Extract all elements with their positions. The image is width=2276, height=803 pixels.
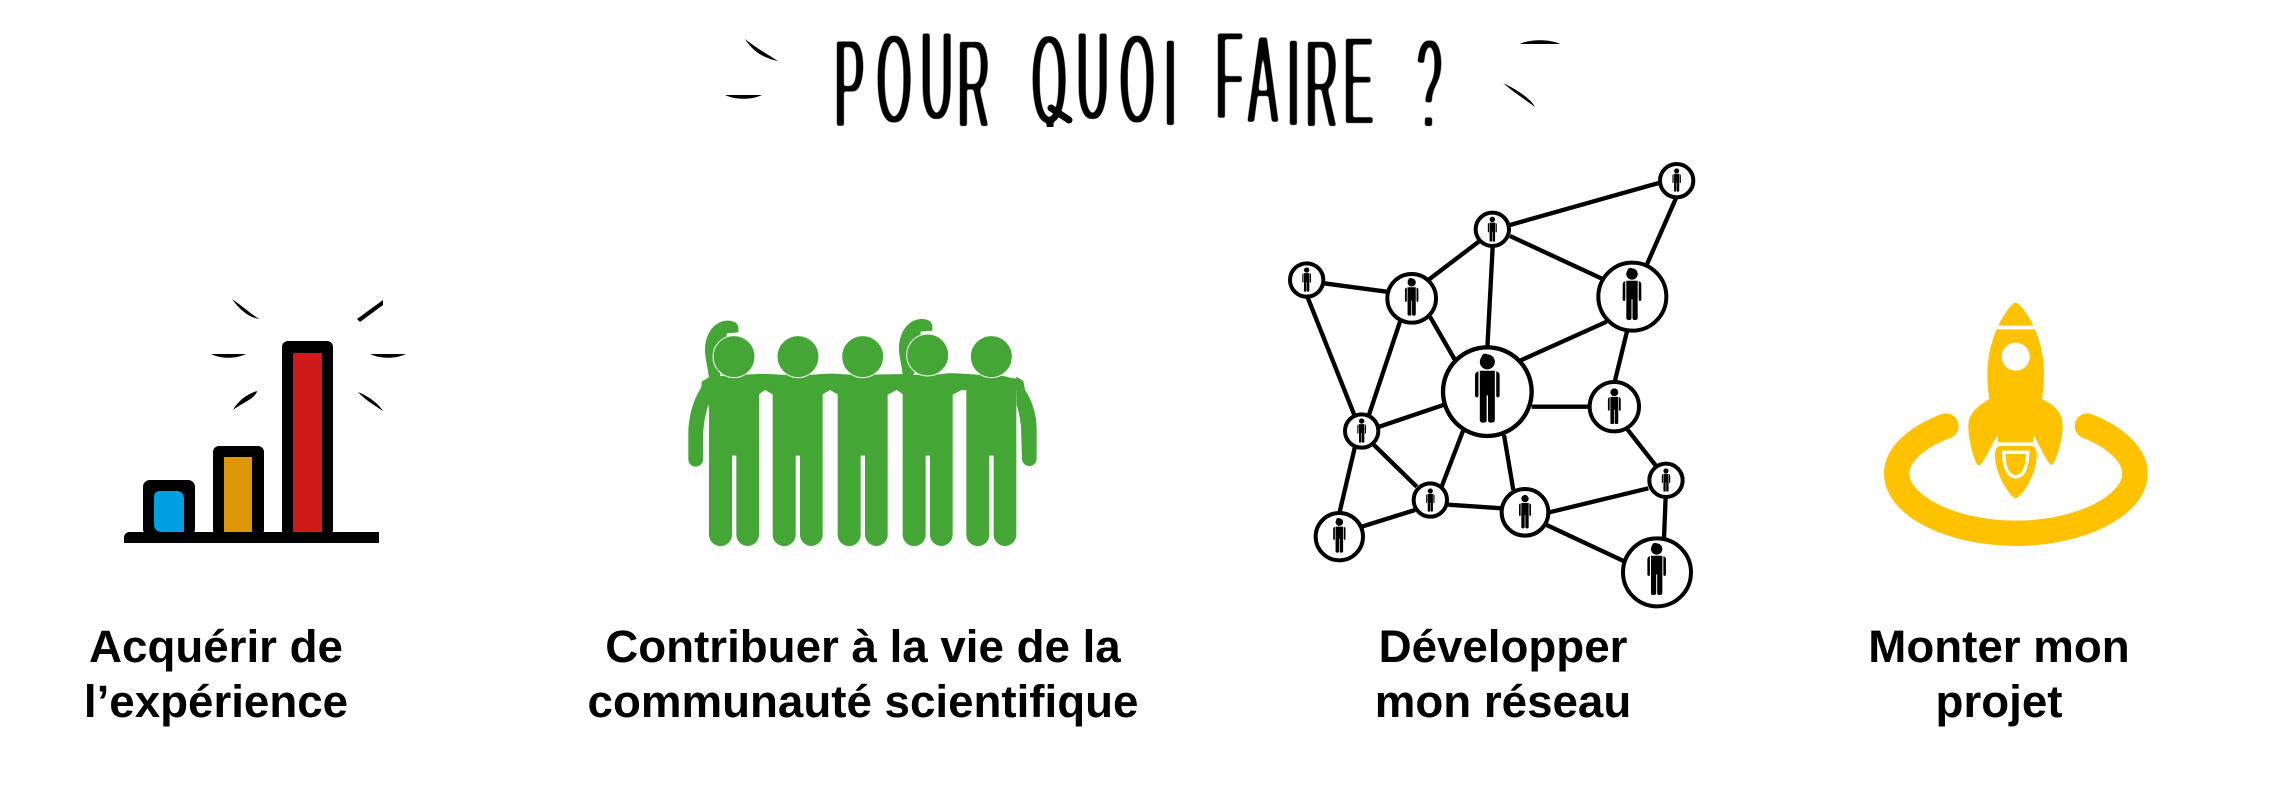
icon: rocket launching from ring — [1897, 303, 2135, 533]
rocket flame — [1995, 446, 2037, 498]
person 5 — [966, 336, 1037, 546]
label: contribuer: communauté scientifique — [588, 676, 1138, 727]
node: upper centre — [1476, 213, 1509, 246]
title accent marks — [725, 39, 1560, 107]
node: lower left small — [1345, 414, 1378, 448]
node: bottom centre — [1502, 489, 1548, 536]
red bar — [282, 341, 333, 536]
person 1 — [688, 321, 759, 546]
rocket body — [1968, 329, 2063, 466]
node: left — [1387, 274, 1436, 323]
icon: network of people — [1290, 164, 1693, 606]
network links — [1307, 183, 1677, 562]
shoulders band — [702, 373, 1023, 394]
node: upper right large — [1598, 263, 1666, 331]
launch ring — [1897, 426, 2135, 533]
node: top right — [1660, 164, 1693, 197]
blue bar — [143, 480, 195, 536]
node: central hub — [1443, 347, 1532, 436]
label: acquérir de l'expérience: l’expérience — [84, 676, 348, 727]
node: bottom centre left — [1414, 483, 1447, 517]
rocket window — [2002, 343, 2030, 371]
icon: bar chart — [124, 299, 406, 543]
orange bar — [213, 446, 264, 536]
rocket nose — [1998, 303, 2033, 326]
person 2 — [773, 336, 823, 546]
node: bottom left — [1316, 513, 1363, 560]
sparks — [211, 299, 406, 411]
label: développer mon réseau: mon réseau — [1375, 676, 1631, 727]
title: POUR QUOI FAIRE ? — [835, 5, 1441, 156]
label: monter mon projet: projet — [1936, 676, 2062, 727]
chart baseline — [124, 532, 379, 543]
person 4 — [899, 319, 953, 546]
label: développer mon réseau: Développer — [1379, 621, 1628, 672]
node: bottom right large — [1623, 538, 1691, 606]
label: monter mon projet: Monter mon — [1868, 621, 2130, 672]
node: right — [1590, 382, 1639, 431]
label: acquérir de l'expérience: Acquérir de — [89, 621, 343, 672]
icon: group of people — [688, 319, 1037, 546]
node: lower right small — [1649, 464, 1683, 497]
person 3 — [838, 336, 888, 546]
node: far left — [1290, 263, 1323, 297]
label: contribuer: Contribuer à la vie de la — [605, 621, 1121, 672]
